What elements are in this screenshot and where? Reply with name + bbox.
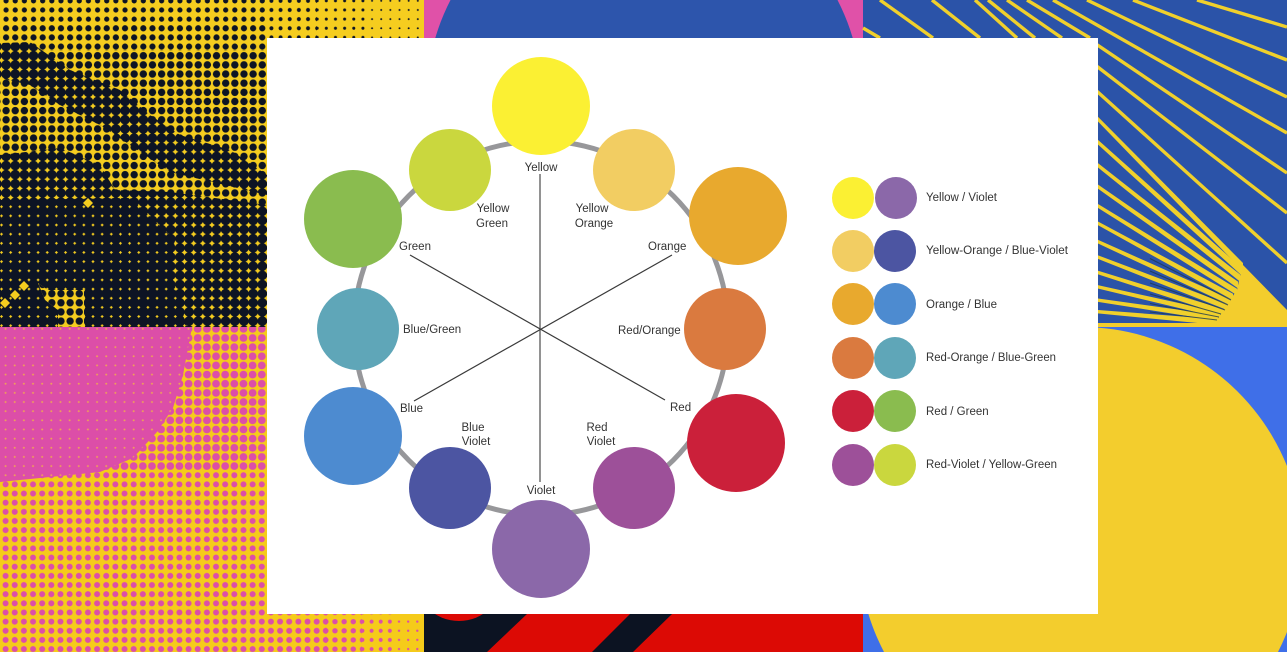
panel: yellow rays on blue	[863, 0, 1287, 327]
wheel labels: Yellow	[576, 203, 609, 215]
panel: halftone top left	[0, 0, 424, 327]
pair: yellow violet: Yellow / Violet	[926, 192, 998, 204]
axis lines	[410, 174, 672, 482]
colour wheel	[304, 57, 787, 598]
wheel labels: Violet	[462, 436, 491, 448]
pair: red-orange blue-green	[832, 337, 1056, 379]
wheel labels: Blue	[461, 422, 485, 434]
wheel labels: Yellow	[477, 203, 510, 215]
ring	[354, 141, 728, 515]
legend: complementary pairs	[832, 177, 1069, 486]
panel: red and navy stripes	[414, 531, 863, 652]
wheel labels: Violet	[587, 436, 616, 448]
panel: blue circle on pink	[424, 0, 863, 60]
wheel labels: Red	[670, 402, 691, 414]
wheel labels: Blue	[400, 403, 423, 415]
pair: yellow-orange blue-violet	[832, 230, 1069, 272]
pair: red-orange blue-green: Red-Orange / Blue-Green	[926, 352, 1056, 364]
pair: red-violet yellow-green	[832, 444, 1057, 486]
pair: orange blue	[832, 283, 997, 325]
wheel labels: Violet	[527, 485, 556, 497]
pair: yellow-orange blue-violet: Yellow-Orange / Blue-Violet	[926, 245, 1069, 257]
wheel labels: Orange	[575, 218, 613, 230]
panel: halftone bottom left	[0, 327, 424, 652]
colour swatches	[304, 57, 787, 598]
wheel labels: Red	[586, 422, 608, 434]
wheel labels: Blue/Green	[403, 324, 461, 336]
wheel labels: Red/Orange	[618, 325, 681, 337]
pair: orange blue: Orange / Blue	[926, 299, 997, 311]
pair: red-violet yellow-green: Red-Violet / Yellow-Green	[926, 459, 1057, 471]
pair: red green	[832, 390, 989, 432]
wheel labels: Orange	[648, 241, 686, 253]
wheel labels: Green	[399, 241, 431, 253]
panel: yellow circle on blue	[859, 327, 1287, 652]
wheel labels	[399, 162, 691, 497]
wheel labels: Yellow	[525, 162, 558, 174]
pair: yellow violet	[832, 177, 998, 219]
pair: red green: Red / Green	[926, 406, 989, 418]
wheel labels: Green	[476, 218, 508, 230]
panel: white card	[267, 38, 1098, 614]
